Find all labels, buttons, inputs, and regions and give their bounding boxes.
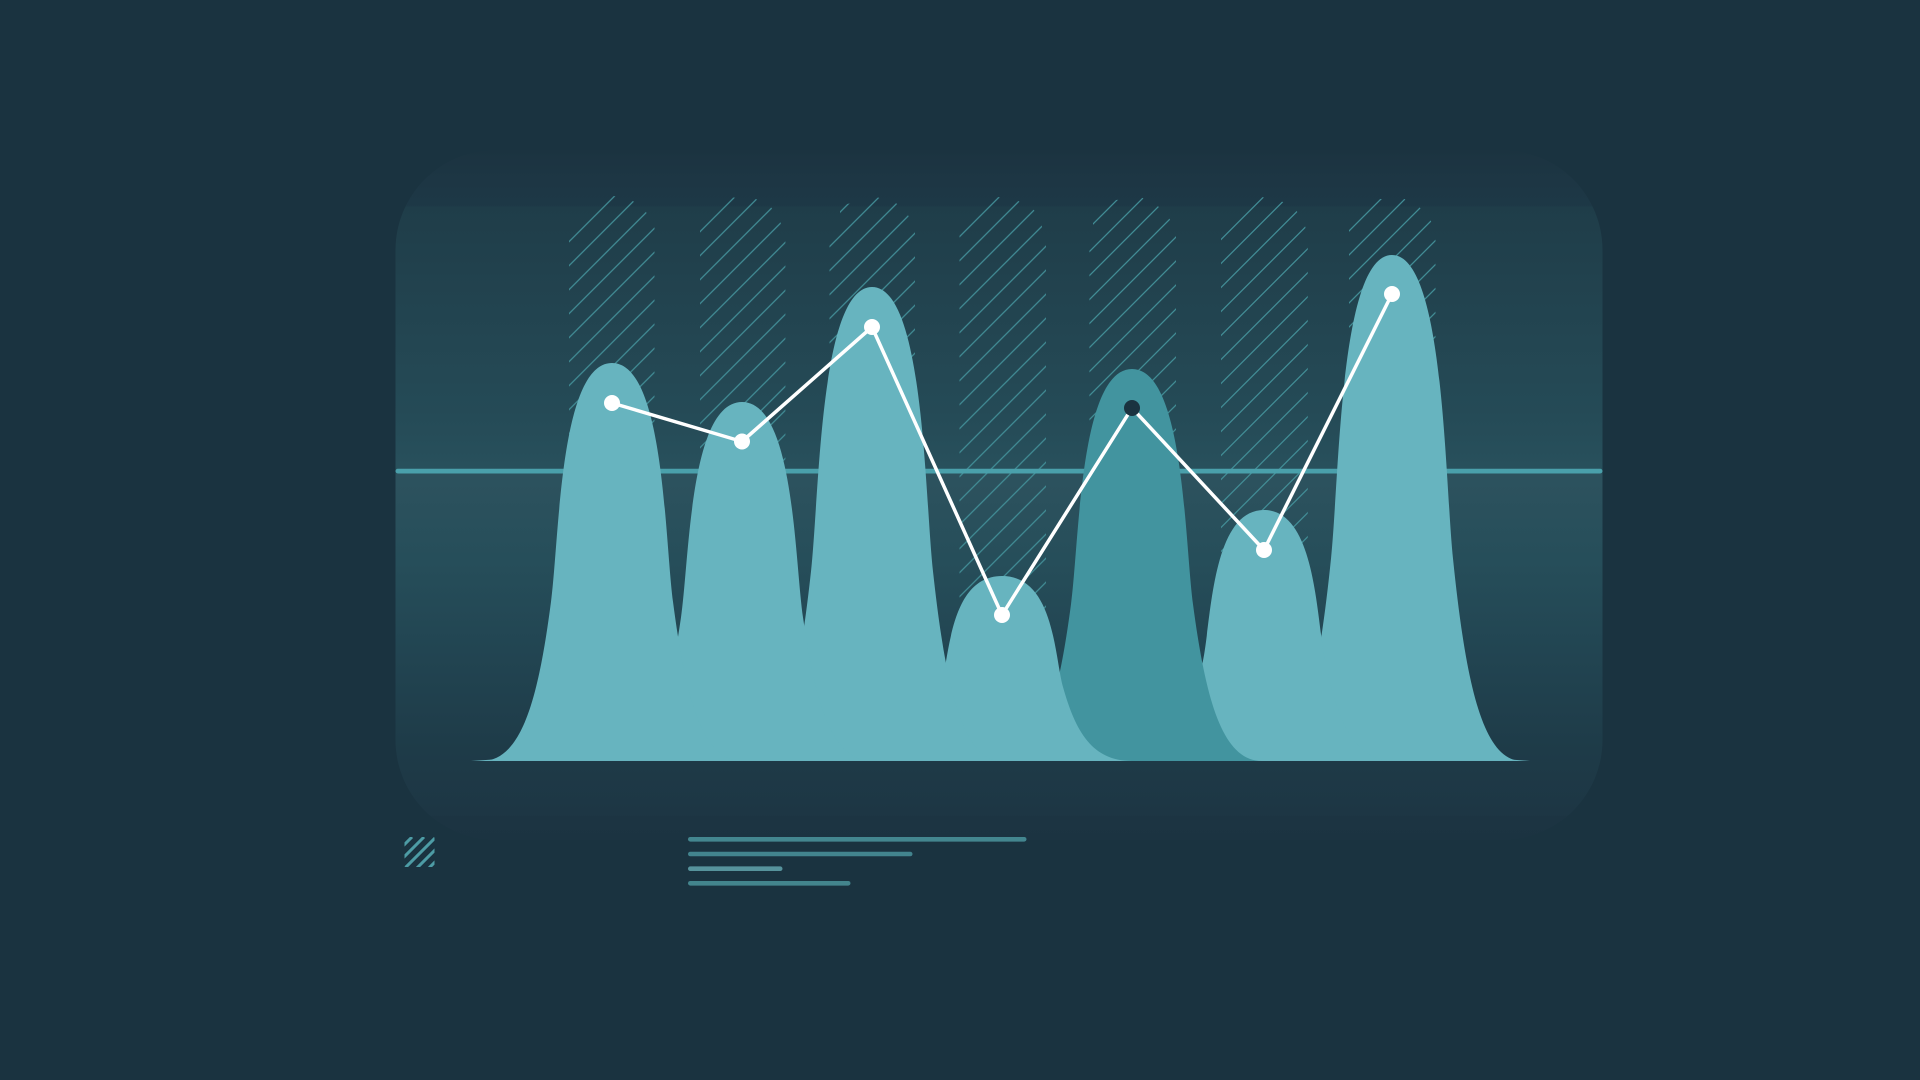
bell-shaped area chart	[482, 255, 1522, 761]
hatch column 5	[1089, 198, 1176, 760]
hatch column 6	[1221, 196, 1308, 760]
hatch column 3	[830, 198, 915, 760]
line 3	[688, 866, 782, 871]
hatch column 4	[960, 197, 1046, 760]
line 1	[688, 837, 1026, 842]
hatch column 1	[569, 196, 654, 760]
hatched columns	[569, 196, 1436, 760]
panel: chart background	[396, 150, 1602, 840]
line 4	[688, 881, 850, 886]
area 4	[872, 576, 1132, 761]
legend text placeholder lines	[688, 837, 1026, 886]
baseline sliver	[471, 759, 1530, 761]
point 7	[1384, 286, 1400, 302]
area 1	[482, 363, 742, 761]
hatch column 2	[700, 197, 785, 760]
area 7	[1262, 255, 1522, 761]
point 4	[994, 607, 1010, 623]
area 2	[612, 402, 872, 761]
area 5: highlighted	[1002, 369, 1262, 761]
area 6	[1134, 510, 1394, 761]
point 5: highlighted	[1124, 400, 1140, 416]
hatch column 7	[1349, 198, 1436, 760]
line 2	[688, 852, 912, 856]
legend icon: hatch swatch	[404, 837, 434, 867]
horizontal reference line	[396, 469, 1602, 474]
point 3	[864, 319, 880, 335]
area 3	[742, 287, 1002, 761]
point 6	[1256, 542, 1272, 558]
point 1	[604, 395, 620, 411]
data points	[604, 286, 1400, 623]
white trend line	[612, 294, 1392, 615]
point 2	[734, 434, 750, 450]
